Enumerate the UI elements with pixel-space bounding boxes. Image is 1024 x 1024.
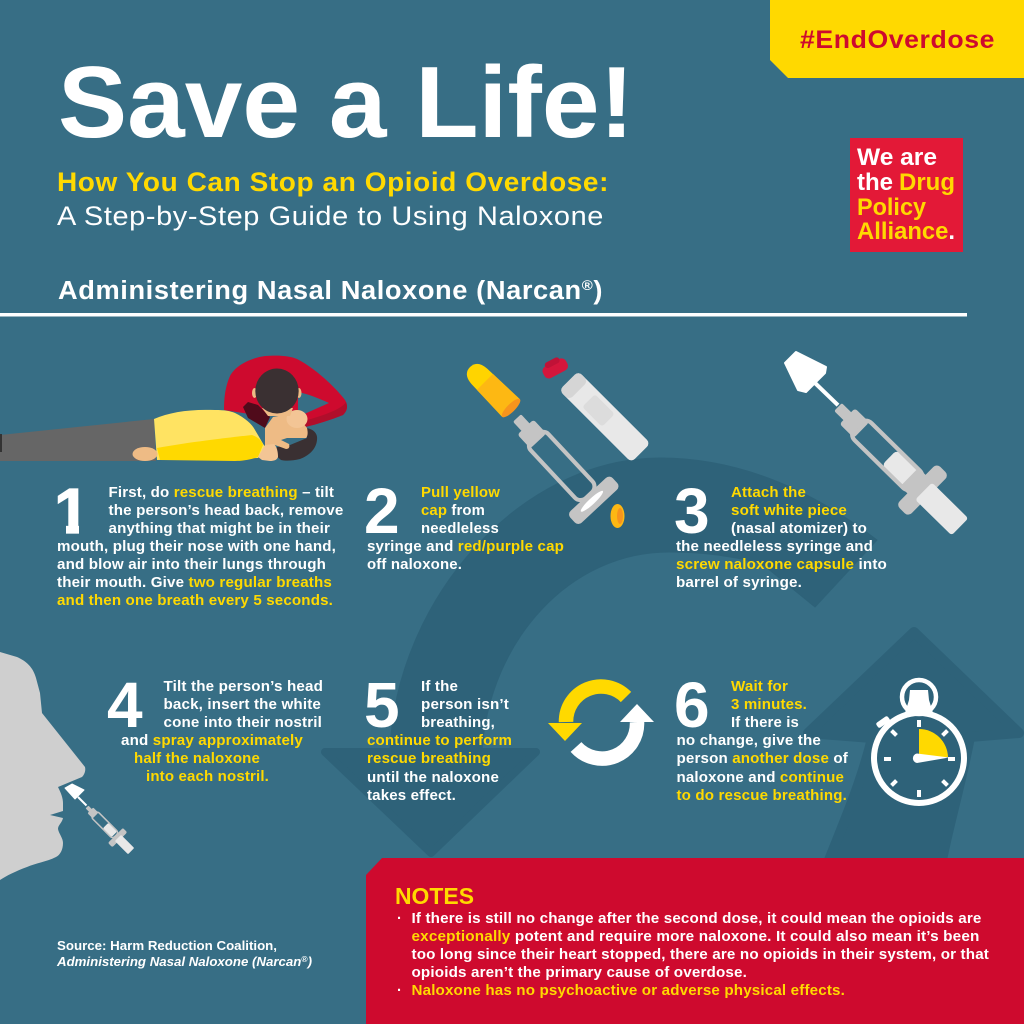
step 1 text: First, do rescue breathing – tilt [108,485,334,501]
step 2 text: off naloxone. [367,557,462,573]
naloxone capsule [559,371,650,462]
step 5 text [367,679,512,804]
needleless syringe [496,398,620,526]
step 5 text: person isn’t [421,697,509,713]
note 2: · [397,983,402,999]
step 3 text: screw naloxone capsule into [676,557,887,573]
panel: step 1 [57,486,343,608]
note 1: · [397,911,402,927]
step 5 text: takes effect. [367,788,456,804]
note 1 [397,911,989,981]
step 4 text: into each nostril. [146,769,269,785]
step 4 text: and spray approximately [121,733,303,749]
step 6 text: Wait for [731,679,788,695]
section heading: ® [582,277,593,293]
number 3: 3 [674,475,710,547]
panel: step 4 [107,669,323,785]
source: Source: Harm Reduction Coalition, [57,939,277,953]
subtitle: How You Can Stop an Opioid Overdose: [57,167,609,197]
logo: Drug Policy Alliance: Alliance. [857,218,955,245]
yellow cap [461,358,523,420]
syringe barrel [818,386,980,548]
number 1: 1 [54,475,90,547]
note 2: Naloxone has no psychoactive or adverse physical effects. [412,983,845,999]
face silhouette [0,652,85,880]
note 1: opioids aren’t the primary cause of overdose. [412,965,747,981]
step 6 text: no change, give the [676,733,821,749]
step 2 text: syringe and red/purple cap [367,539,564,555]
step 4 text: back, insert the white [164,697,321,713]
panel: step 6 [674,669,848,804]
step 1 text: and blow air into their lungs through [57,557,326,573]
step 5 text: breathing, [421,715,495,731]
step 5 text: If the [421,679,458,695]
subtitle: A Step-by-Step Guide to Using Naloxone [57,201,604,231]
number 6: 6 [674,669,710,741]
step 2 text: Pull yellow [421,485,501,501]
step 6 text: If there is [731,715,799,731]
nasal atomizer [785,352,839,407]
step 4 text [121,679,323,785]
step 1 text: and then one breath every 5 seconds. [57,593,333,609]
panel: step 2 [364,475,564,573]
panel: step 5 [364,669,512,804]
logo: Drug Policy Alliance: Policy [857,194,927,221]
panel: notes [366,858,1024,1024]
title: Save a Life! [58,47,634,159]
step 3 text [676,485,887,591]
step 3 text: soft white piece [731,503,847,519]
icon: syringe with caps removed [461,354,650,528]
number 4: 4 [107,669,143,741]
step 1 text [57,485,344,609]
source: ) [305,955,312,969]
logo: Drug Policy Alliance: Drug [899,169,955,196]
logo: Drug Policy Alliance [850,138,963,252]
icon: face profile with nasal spray [0,652,139,880]
icon: stopwatch [874,680,964,803]
icon: rescue breathing illustration [0,356,347,461]
source: ® [301,955,308,964]
step 5 text: until the naloxone [367,770,499,786]
note 1: too long since their heart stopped, there are no opioids in their system, or that [412,947,989,963]
background cycle arrows [325,458,1019,860]
step 4 text: Tilt the person’s head [164,679,323,695]
section heading: ) [593,277,603,305]
step 3 text: the needleless syringe and [676,539,873,555]
step 1 text: their mouth. Give two regular breaths [57,575,332,591]
step 6 text: 3 minutes. [731,697,807,713]
step 6 text: to do rescue breathing. [676,788,847,804]
step 3 text: (nasal atomizer) to [731,521,867,537]
step 5 text: continue to perform [367,733,512,749]
step 3 text: Attach the [731,485,806,501]
source: Administering Nasal Naloxone (Narcan [57,955,288,969]
step 2 text [367,485,564,573]
step 5 text: rescue breathing [367,751,491,767]
small cap [610,504,624,528]
notes heading: NOTES [395,883,474,909]
note 1: If there is still no change after the second dose, it could mean the opioids are [412,911,982,927]
section heading: Administering Nasal Naloxone (Narcan [58,277,548,305]
step 2 text: needleless [421,521,499,537]
step 1 text: mouth, plug their nose with one hand, [57,539,336,555]
note 1: exceptionally potent and require more naloxone. It could also mean it’s been [412,929,980,945]
step 3 text: barrel of syringe. [676,575,802,591]
logo: Drug Policy Alliance: the [857,169,893,196]
step 1 text: the person’s head back, remove [108,503,344,519]
icon: repeat arrows [548,686,654,759]
hashtag banner: #EndOverdose [800,26,995,54]
subtitle [57,167,609,231]
step 6 text: person another dose of [676,751,848,767]
step 1 text: anything that might be in their [108,521,330,537]
number 2: 2 [364,475,400,547]
step 2 text: cap from [421,503,485,519]
step 6 text [676,679,848,804]
panel: step 3 [674,475,887,591]
step 4 text: half the naloxone [134,751,260,767]
step 6 text: naloxone and continue [676,770,844,786]
number 5: 5 [364,669,400,741]
logo: Drug Policy Alliance: We are [857,144,937,171]
red cap [539,354,570,380]
icon: syringe with nasal atomizer and capsule [785,352,980,548]
hashtag banner [770,0,1024,78]
source [56,939,312,969]
small syringe [65,784,139,859]
step 4 text: cone into their nostril [164,715,322,731]
